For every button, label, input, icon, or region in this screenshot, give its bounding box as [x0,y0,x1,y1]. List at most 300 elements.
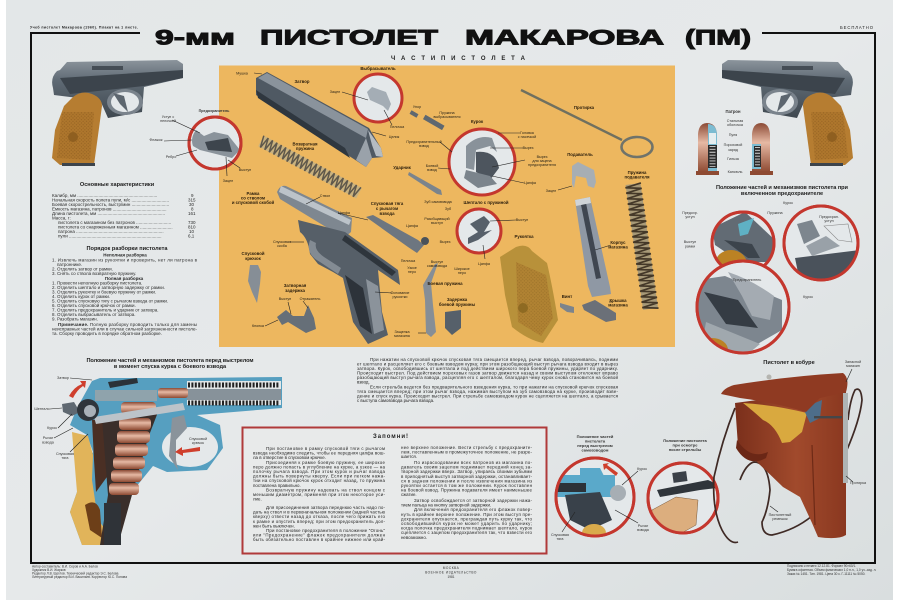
remember right column: Затвор освобождается от затворной задержки нажа- [414,498,533,503]
remember left column: взвода необходимо следить, чтобы ее передняя цапфа вош- [253,451,386,456]
part: magazine body [575,197,611,297]
remember left column: При постановке предохранителя в положение "Огонь" [266,528,385,533]
cartridge labels: Стальная [727,119,743,123]
cartridge labels: Пуля [729,133,737,137]
cartridge labels: Капсюль [728,170,742,174]
remember left column: должны быть повернуты кверху. Если при легком нажа- [253,474,386,479]
title: ПИСТОЛЕТ [260,26,438,50]
part labels: Предохранительный [406,140,442,144]
disassembly text: 6. Отделить спусковой крючок от рамки. [52,302,136,308]
part labels: выбрасывателя [434,115,460,119]
heading: disassembly: Порядок разборки пистолета [87,245,168,252]
spec table: 315 [188,198,196,202]
title: МАКАРОВА [465,26,664,50]
safety magnifier labels: Предохранитель [199,109,230,113]
spec table: 9 [191,193,194,198]
holster strap [714,389,862,542]
part labels: Зацеп [223,179,233,183]
remember right column: По израсходовании всех патронов из магазина по- [414,460,533,465]
magnifier: safety on, hammer [784,206,860,282]
holster lower strap [736,440,768,461]
part labels: подавателя [624,174,650,180]
part labels: Выступ [431,260,443,264]
part labels: магазина [608,244,628,250]
grip recess [85,502,102,538]
frame interior [92,418,118,492]
cartridge labels: Гильза [727,157,740,161]
cutaway labels: Курок [47,426,57,430]
footer publisher [425,566,477,579]
heading: before shot [86,357,254,370]
spec table: 810 [188,224,196,230]
spec table: 8 [191,206,194,212]
part labels: Боевой [426,164,438,168]
disassembly text: 7. Отделить предохранитель и ударник от затвора. [52,308,159,312]
part labels: Крышка [609,298,627,303]
top left caption: Учеб пистолет Макарова (1960). Плакат на 1 листе. [30,26,138,30]
heading: inspection: Положение пистолета [663,438,708,443]
magazine well [100,412,158,545]
safety magnifier labels: Флажок [149,138,163,142]
remember left column: к рамке и опустить вперед; при этом предохранитель дол- [253,519,386,524]
part labels: Основание [391,291,409,295]
part labels: Курок [471,119,484,124]
part: grip panel [500,246,558,343]
heading: self-cocking: перед выстрелом [577,443,613,448]
magazine lower [104,503,121,545]
heading: self-cocking [577,434,614,452]
part labels: взвод [419,144,430,148]
heading: specs: Основные характеристики [80,182,155,188]
part: follower [572,162,596,188]
part labels: Вырез [523,146,534,150]
heading: inspection: при осмотре [673,442,698,448]
part: mainspring [423,263,438,337]
spec table: патрона ...................................................................... [58,229,164,234]
remember heading: Запомни! [373,434,409,440]
panel background [219,66,675,347]
cartridge labels: Пороховой [724,143,742,147]
remember right column: на боевой взвод. Пружина подавателя имеет наименьшее [401,488,533,493]
safety magnifier labels: пелочкой [160,119,176,123]
part labels: Вырез [537,155,548,159]
part labels: Вырез [440,240,451,244]
holster side strip [843,393,848,483]
safety magnifier labels: Уступ с [162,115,174,119]
part labels: скоба [277,244,288,248]
disassembly text: 3. Отделить рукоятку и боевую пружину от рамки. [52,290,156,294]
part labels: Пелочка [401,259,416,263]
holster labels: Пистолетный [769,513,791,517]
cutaway labels: Спусковая [56,452,74,456]
cutaway labels: тяга [61,456,69,460]
part labels: со стволом [241,196,265,200]
part labels: Спусковая [273,240,291,244]
disassembly text: Примечание. Полную разборку проводить только для замены [58,322,197,327]
remember left column: жен быть выключен. [253,523,295,528]
part labels: Мушка [236,72,249,76]
footer left: Художник В.И. Жарков [32,568,66,572]
self-cocking labels: Спусковая [551,533,569,537]
safety magnifier labels [682,201,839,299]
part labels: Пелочка [390,125,405,129]
pistol left view [52,60,183,166]
chambered cartridge [158,388,188,398]
disassembly text: 2. Отделить затвор от рамки. [52,266,113,272]
remember right column: творной задержки вверх. Затвор, упираясь своими зубьями [401,469,533,474]
trigger [169,415,187,470]
remember right column: освободившийся курок не может ударить по ударнику; [401,521,532,526]
operating text: дение и спуск курка. Происходит выстрел. При стрельбе самовзводом курок не сцепляется на шептало, а срывается [357,394,619,398]
barrel and recoil spring [95,378,281,405]
footer left: Редактор Л.В. Щеглов. Технический редактор Э.С. Белова [32,572,119,576]
free distribution mark: БЕСПЛАТНО [840,25,874,30]
footer right [787,564,876,576]
remember left column: полочку рычага взвода. При этом курок и рычаг взвода [253,469,386,474]
self-cocking labels: Курок [637,467,647,471]
part labels: самовзвода [427,264,448,268]
cutaway labels: Шептало [34,407,50,411]
part labels: Выбрасыватель [360,66,396,71]
part: magazine spring [625,183,659,310]
holster labels: Протирка [850,481,867,485]
holster flap pin [766,374,772,380]
cutaway pistol [62,377,282,545]
part labels: перо [458,271,466,275]
cartridges [696,109,773,175]
part: trigger bar [366,215,429,253]
panel: remember [242,428,546,554]
footer publisher: МОСКВА [443,566,460,570]
remember left column: лие. [253,497,262,502]
disassembly text: 1. Извлечь магазин из рукоятки и проверить, нет ли патрона в [52,258,198,262]
remember right column: шается. [401,454,417,459]
part labels: Цапфа [406,224,419,228]
part labels: выступ [431,221,443,225]
magnifier: safety on, breech [696,261,789,362]
part: frame with barrel [277,186,400,344]
title: (ПМ) [685,26,751,50]
safety magnifier labels: Пружина [767,211,784,215]
cartridge labels: заряд [728,148,739,152]
operating text: Происходит выстрел. Под действием пороховых газов затвор движется назад и своим выступом отклоняет вправо [357,370,619,376]
cutaway labels [34,376,207,460]
disassembly text: 2. Отделить шептало и затворную задержку от рамки. [52,285,165,290]
part labels: Спусковая тяга [371,201,404,206]
spec table: 730 [188,220,196,225]
cutaway labels: крючок [192,441,204,445]
part labels: Пружина [628,170,647,175]
part: recoil spring [258,136,362,198]
heading: self-cocking: Положение частей [577,434,614,439]
panel: pistol parts [164,66,675,347]
remember left column: или "Предохранение" флажок предохранителя должен [253,533,386,538]
spec table: Калибр, мм ................................................................ [52,193,157,198]
part labels: Винт [562,294,572,299]
part labels: Зацеп [546,189,556,193]
part labels: Кнопка [252,324,265,328]
part: small pins [410,110,445,130]
heading: inspection: после стрельбы [669,447,702,452]
self-cocking labels: тяга [556,537,564,541]
remember right column: дохранителя опускается, преграждая путь курку так, что [401,516,533,521]
disassembly text: та. Сборку проводить в порядке обратном разборке. [52,331,162,336]
arrow: self-cocking hammer [603,463,618,476]
part labels: Зуб [445,207,451,211]
part labels: Головка [520,131,535,135]
footer left: Автор-составитель: В.И. Серов и А.А. Белов [32,564,98,568]
part labels: с насечкой [518,135,536,139]
disassembly text: 3. Снять со ствола возвратную пружину. [52,271,136,276]
self-cocking labels [551,467,650,541]
part labels: Ударник [393,165,412,170]
remember left column: перо должно попасть в углубление на курке, а узкое — на [253,464,386,469]
arrow: trigger motion [175,447,200,456]
trigger guard opening [162,427,218,467]
pistol right view [722,60,853,166]
remember right column: когда полочка предохранителя поднимает шептало, курок [401,526,532,531]
part labels: Широкое [454,267,470,271]
spec table: Масса, г: [52,216,71,220]
spec table: Длина пистолета, мм ...................................................... [52,211,165,216]
remember left column: Для присоединения затвора переднюю часть надо по- [266,505,386,510]
part: striker [408,172,442,195]
cartridge labels: оболочка [727,123,744,127]
part labels: с рычагом [376,206,398,211]
safety magnifier labels: уступ [824,219,834,223]
holster labels: магазин [846,364,860,368]
safety magnifier labels: Предохран. [819,215,839,219]
operating text: При нажатии на спусковой крючок спусковая тяга смещается вперед, рычаг взвода, поворачиваясь, подними [370,357,619,362]
remember right column [401,445,533,540]
cartridge stack [109,402,156,495]
part labels: Цапфа [524,181,537,185]
part labels: взвод [427,168,438,172]
remember box [242,428,546,554]
cartridge labels [724,119,744,174]
disassembly text: Полная разборка [105,275,144,281]
operating text: с выступа самовзвода рычага взвода. [357,398,434,403]
cartridge left cutaway [696,123,719,175]
self-cocking labels: Рычаг [638,524,649,528]
arrow: hammer motion [69,381,86,398]
part labels: Ствол [320,194,330,198]
remember left column: меньшим диаметром, применяя при этом некоторое уси- [253,492,386,497]
magnifier: safety [189,117,241,169]
magnifier: extractor [354,74,402,122]
part labels: магазина [608,302,628,308]
footer left [32,564,127,579]
part labels: Выступ [516,218,528,222]
cartridge right cutaway [750,123,773,175]
part: slide [256,72,383,167]
operating text: Если стрельба ведется без предварительного взведения курка, то при нажатии на спусковой крючок спусковая [370,384,619,390]
part labels: рукоятки [393,295,407,299]
cutaway labels: взвода [42,440,55,444]
part labels: Затвор [294,79,310,84]
holster labels: Запасной [845,360,861,364]
remember left column: ла в отверстие в спусковом крючке. [253,455,326,460]
holster clasp [814,416,842,418]
safety magnifier labels: Ребро [166,155,176,159]
part labels: Защелка [394,330,410,334]
remember left column: дать на ствол и в первоначальном положении (задней частью [253,510,386,515]
self-cocking labels: взвода [637,528,650,532]
part: slide stop [277,305,316,333]
remember right column: в приподнятый выступ затворной задержки, останавливает- [401,474,533,479]
disassembly text: 9. Разобрать магазин. [52,316,98,322]
remember right column: даватель своим зацепом поднимает передний конец за- [401,465,533,470]
spec table: пистолета с магазином без патронов ............................ [58,220,171,225]
remember right column: Для включения предохранителя его флажок повер- [414,507,533,512]
cutaway labels: Затвор [57,376,69,380]
panel: disassembly order [52,245,198,336]
footer publisher: 1981 [447,575,455,579]
pistol grip in holster [743,403,807,443]
part labels: Рукоятка [514,234,534,239]
disassembly text: неисправных частей или в случае сильной загрязненности пистоле- [52,326,198,332]
part labels: Разобщающий [424,217,450,221]
part labels: Зацеп [330,90,340,94]
heading: safety positions: Положение частей и механизмов пистолета при [716,184,849,191]
spec table [52,193,196,238]
part labels: для зацепа [532,159,553,163]
disassembly text: патроннике. [57,262,82,267]
part labels [223,66,650,338]
part labels: Выступ [279,297,291,301]
spec table: 30 [189,202,195,207]
safety magnifier labels: Выступ [684,240,696,244]
footer left: Литературный редактор В.И. Васильев. Корректор Ю.С. Попова [32,575,127,579]
heading: holster: Пистолет в кобуре [763,359,815,366]
remember left column [253,446,386,542]
remember right column: лем, поставленным в промежуточное положение, не разре- [401,450,533,455]
remember right column: нее верхнее положение. Вести стрельбу с предохраните- [401,445,533,450]
holster labels [769,360,867,521]
cutaway labels: Рычаг [43,436,54,440]
part labels: пружина [296,146,315,151]
remember right column: нуть в крайнее верхнее положение. При этом выступ пре- [401,512,533,517]
part labels: Отражатель [300,297,320,301]
holstered pistol back [803,400,822,423]
part: trigger [248,265,261,303]
part labels: боевой пружины [439,302,475,307]
remember right column: ся в заднем положении и после извлечения магазина из [401,478,532,483]
operating text: тяга смещается вперед; при этом рычаг взвода, нажимая выступом на зуб самовзвода на курке, производит взве- [357,389,619,394]
part: screw [560,303,574,313]
remember left column: Возвратную пружину надевать на ствол концом с [266,487,386,492]
part labels: Упор [413,105,421,109]
part labels: Затворная [284,283,307,288]
footer publisher: ВОЕННОЕ ИЗДАТЕЛЬСТВО [425,570,477,574]
part labels: предохранителя [528,163,556,167]
subtitle: Ч А С Т И П И С Т О Л Е Т А [391,56,526,62]
part labels: Протирка [574,105,595,110]
hammer [62,399,99,421]
remember left column: При постановке в рамку спусковой тяги с рычагом [266,446,385,451]
remember left column: тии на спусковой крючок курок отходит назад, то пружина [253,478,386,483]
cutaway labels: Спусковой [189,437,207,441]
operating text: взвод. [357,380,370,384]
remember right column: сжатие. [401,492,417,497]
footer right: Бумага офсетная. Объем физических 1,0 п.л., 1,0 уч.-изд. л. [787,568,876,572]
remember right column: рукоятки остается в том же положении. Курок поставлен [401,483,533,488]
part labels: Спусковой [242,251,265,256]
part labels: крючок [245,256,262,261]
magnifier: sear [457,209,501,253]
magnifier: safety on, mechanism [710,210,776,266]
safety magnifier labels: уступ [685,215,695,219]
magnifier: inspection [648,463,718,535]
part labels: Боевая пружина [427,281,463,286]
spec table: пистолета со снаряженным магазином .......................... [58,224,173,230]
part labels: магазина [394,334,411,338]
holster labels: ремешок [772,517,788,521]
holster fold [812,445,815,525]
operating text: затвора. Курок, освободившись от шептала и под действием широкого пера боевой пружины, ударяет по ударнику. [357,366,618,371]
heading: safety positions: включенном предохранителе [741,191,823,197]
remember left column: быть обязательно поставлен в крайнее нижнее или край- [253,537,386,542]
part labels: Возвратная [292,142,318,146]
operating text [357,357,619,403]
part labels: Корпус [610,240,626,245]
spec table: Емкость магазина, патронов ........................................... [52,206,166,212]
safety magnifier labels: рамки [685,244,695,248]
spec table: Начальная скорость полета пули, м/с .............................. [52,198,169,202]
safety magnifier labels [149,109,230,159]
holster [714,360,867,542]
safety magnifier labels: Предохранитель [733,278,761,282]
spec table: Боевая скорострельность, выстр/мин .............................. [52,202,169,207]
trigger bar [94,403,185,424]
disassembly text: Неполная разборка [103,252,147,258]
operating text: разобщающий выступ рычага взвода, расцепляя его с шепталом, благодаря чему курок снова становится на боевой [357,375,619,380]
heading: inspection [663,438,708,452]
spec table: 6,1 [188,234,195,238]
magnifier: hammer [449,129,515,195]
remember left column: Присоединяя к рамке боевую пружину, ее широкое [266,460,386,465]
leader lines [164,73,612,333]
footer right: Подписано к печати 12.12.81. Формат 90×60/1. [787,564,856,568]
heading: self-cocking: самовзводом [582,448,609,452]
remember left column: кверху) отвести назад до отказа, после чего прижать его [253,514,386,519]
part labels: Цапфа [478,262,491,266]
spec table: 10 [189,229,195,234]
part: cleaning rod [521,90,652,157]
part labels: Подаватель [567,152,593,157]
part labels: Выступ [239,168,251,172]
part labels: Зуб самовзвода [424,200,453,204]
title [155,26,751,50]
panel: specifications [52,182,196,238]
part: magazine base [582,300,616,322]
safety magnifier labels: Курок [783,201,793,205]
part labels: Пружина [439,111,456,115]
disassembly text: 4. Отделить курок от рамки. [52,294,110,299]
safety magnifier labels: Курок [803,295,813,299]
part labels: взвода [379,211,395,216]
heading: before shot: Положение частей и механизмов пистолета перед выстрелом [86,357,254,364]
title: 9-мм [155,26,235,50]
disassembly text: 8. Отделить выбрасыватель от затвора. [52,312,136,317]
footer right: Заказ № 1451. Тип. 1981. Цена 30 к. Г-11111 № 5050. [787,572,865,576]
part labels: перо [408,270,416,274]
part: stop of mainspring [445,310,461,335]
safety magnifier labels: Предохр. [682,211,698,215]
remember right column: сцепляется с зацепом предохранителя так, что взвести его [401,530,533,535]
spec table: 161 [188,211,196,216]
disassembly text [52,252,198,336]
